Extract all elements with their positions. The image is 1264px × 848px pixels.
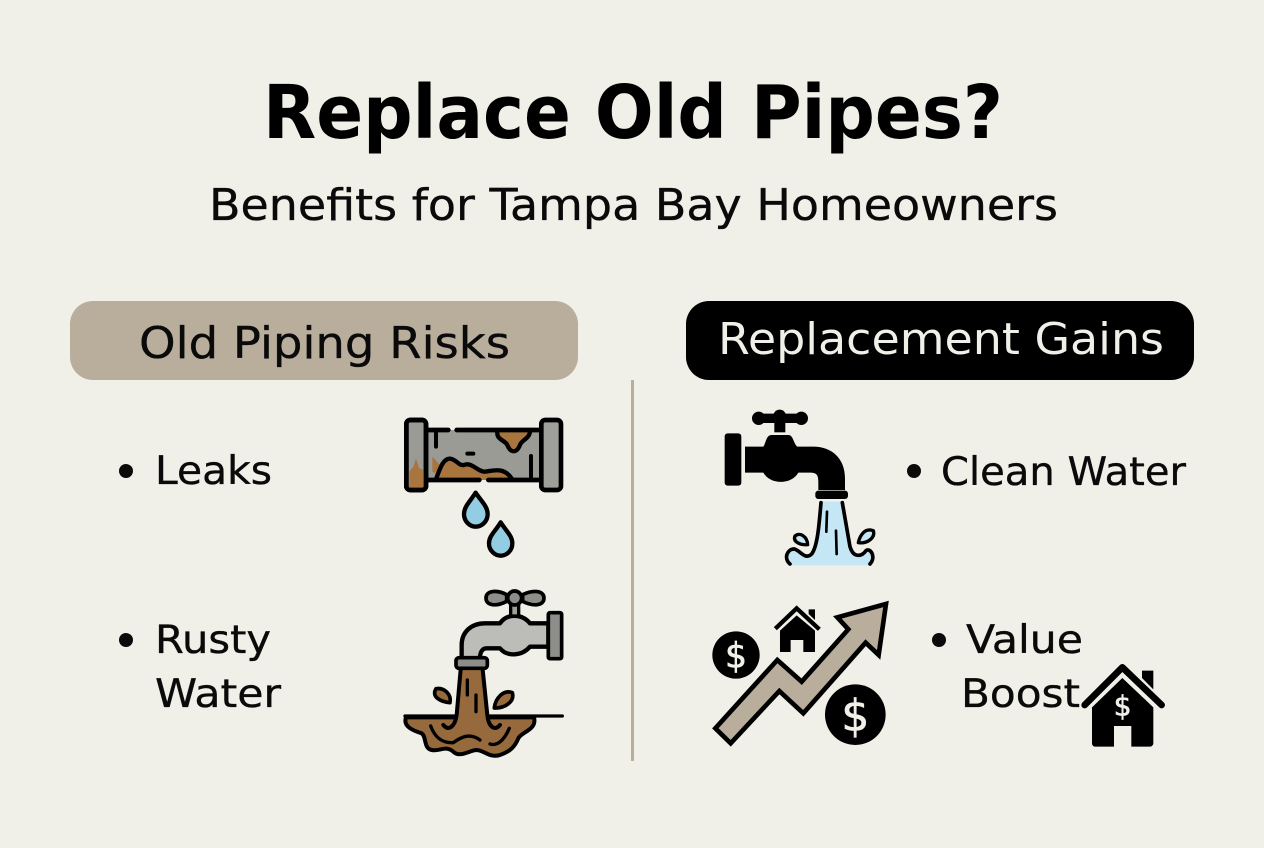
subtitle: Benefits for Tampa Bay Homeowners [209, 180, 1058, 231]
icon: house with dollar sign: $ [1114, 690, 1132, 723]
icon: faucet with clean water [725, 410, 874, 565]
icon: house with dollar sign [1085, 667, 1162, 747]
title: Replace Old Pipes? [263, 70, 1003, 156]
panel heading: old piping risks: Old Piping Risks [139, 318, 510, 369]
icon: small dollar coin: $ [725, 636, 747, 676]
icon: rising value arrow with house and dollars [712, 604, 886, 745]
panel heading: old piping risks [70, 301, 578, 380]
icon: small house [775, 608, 819, 652]
icon: large dollar coin [825, 684, 886, 745]
bullet: value boost: Value [966, 618, 1083, 663]
bullet: rusty water: Rusty [155, 618, 271, 663]
bullet: leaks: Leaks [155, 449, 272, 494]
panel heading: replacement gains [686, 301, 1194, 380]
icon: large dollar coin: $ [841, 691, 869, 742]
icon: rusty leaking pipe [406, 420, 561, 556]
bullet: value boost: Boost [961, 672, 1080, 717]
bullet: rusty water [119, 618, 282, 717]
icon: small dollar coin [712, 631, 760, 679]
panel heading: replacement gains: Replacement Gains [718, 314, 1164, 365]
bullet: value boost [932, 618, 1083, 717]
icon: faucet with rusty water [405, 591, 562, 756]
bullet: rusty water: Water [155, 672, 282, 717]
bullet: clean water: Clean Water [941, 450, 1187, 495]
